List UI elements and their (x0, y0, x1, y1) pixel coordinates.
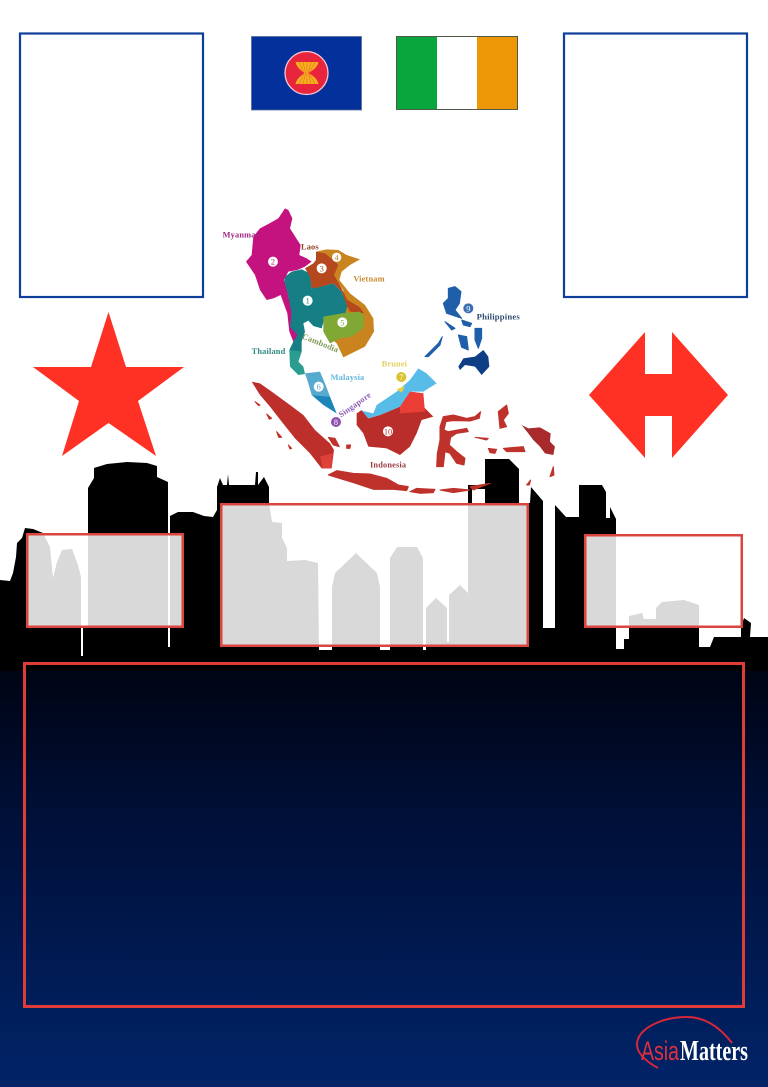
mainland countries: 3 (320, 264, 324, 273)
country badges (268, 253, 347, 327)
skyline silhouette (0, 459, 768, 672)
maritime labels: Indonesia (370, 460, 407, 469)
Philippines: Philippines (477, 311, 520, 321)
maritime badges (314, 382, 324, 392)
panel: right translucent box (585, 535, 742, 627)
maritime countries (252, 350, 555, 493)
mainland countries: 4 (335, 253, 340, 262)
icon: Irish flag (396, 36, 518, 110)
panel: left translucent box (27, 534, 183, 627)
Sumatra (252, 382, 334, 468)
Malay peninsula (305, 372, 330, 397)
mainland countries: 1 (306, 297, 310, 306)
country labels: Thailand (252, 347, 286, 356)
Cambodia (323, 312, 364, 343)
maritime labels: Brunei (382, 360, 408, 369)
maritime labels (331, 360, 408, 469)
Borneo (357, 392, 433, 455)
icon: red double arrow (589, 332, 728, 458)
country labels: Cambodia (301, 332, 340, 355)
panel: centre translucent box (221, 504, 528, 646)
Indonesian islands (255, 402, 554, 493)
icon: red star (33, 312, 184, 456)
Thailand (284, 269, 347, 362)
maritime countries: 6 (317, 383, 321, 392)
Myanmar (246, 208, 312, 342)
country labels: Vietnam (353, 275, 385, 284)
maritime countries: 8 (334, 418, 338, 427)
Vietnam (316, 249, 374, 357)
country labels (223, 230, 385, 356)
panel: top right blue frame (564, 34, 747, 297)
maritime labels: Malaysia (331, 373, 365, 382)
maritime labels: Singapore (337, 390, 373, 419)
panel: top left blue frame (20, 34, 203, 297)
mainland countries: 5 (340, 318, 344, 327)
country labels: Myanmar (223, 230, 260, 239)
country labels: Laos (301, 242, 319, 251)
logo: Asia Matters (637, 1017, 748, 1068)
Philippines (425, 287, 520, 375)
map of Southeast Asia (223, 208, 555, 493)
mainland countries (223, 208, 385, 362)
icon: ASEAN flag (252, 36, 362, 110)
Laos (305, 252, 364, 313)
mainland countries: 2 (271, 258, 275, 267)
Philippines: 9 (466, 304, 470, 313)
maritime countries: 10 (384, 427, 392, 436)
logo: Asia Matters: Asia (641, 1036, 680, 1066)
dark navy lower panel background (0, 671, 768, 1087)
panel: large lower box (24, 664, 744, 1006)
maritime countries: 7 (399, 373, 403, 382)
